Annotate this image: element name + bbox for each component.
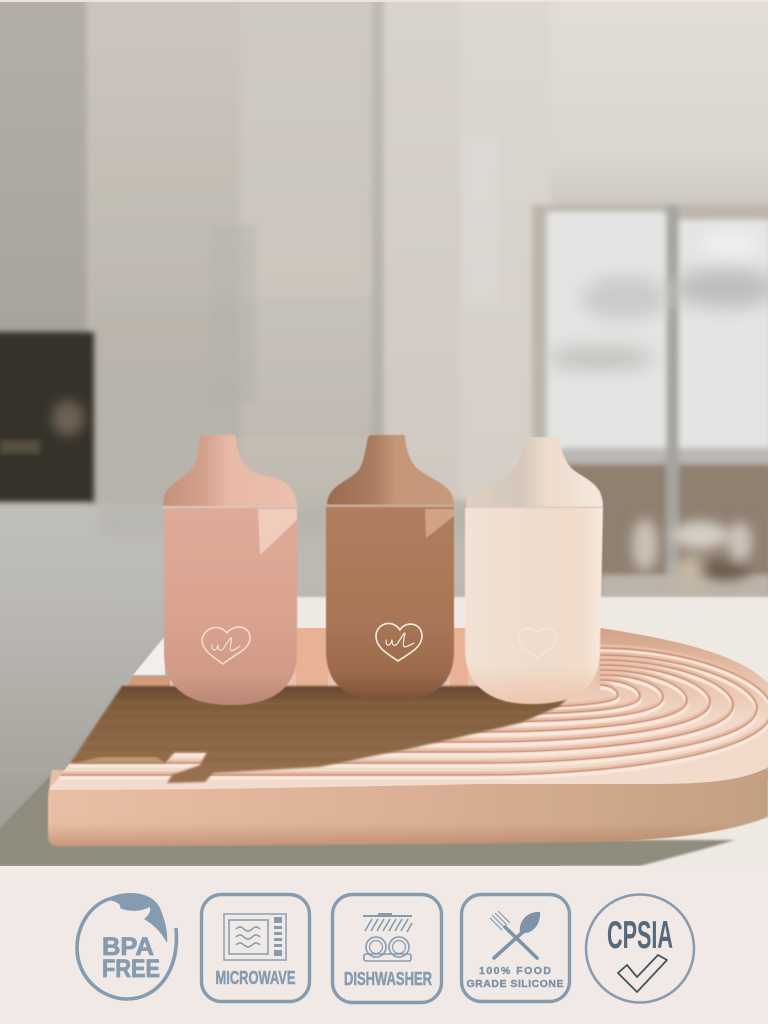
board front edge bbox=[48, 770, 768, 846]
ridges bbox=[60, 646, 768, 778]
cups bbox=[162, 435, 603, 705]
icon: dishwasher bbox=[332, 894, 442, 1002]
cutting board bbox=[48, 628, 768, 846]
icon: CPSIA bbox=[586, 894, 694, 1002]
icon: food grade silicone bbox=[462, 894, 570, 1002]
counter bbox=[296, 596, 768, 683]
icon: BPA free bbox=[77, 893, 176, 999]
icon: CPSIA: CPSIA bbox=[607, 914, 673, 957]
icon: microwave bbox=[202, 894, 310, 1002]
sunlit slab behind cups bbox=[125, 676, 170, 688]
icon: dishwasher: DISHWASHER bbox=[344, 969, 432, 989]
icon: BPA free: FREE bbox=[102, 955, 160, 983]
cup: brown bbox=[326, 435, 454, 701]
cup: cream bbox=[465, 437, 603, 704]
icon: BPA free: BPA bbox=[102, 933, 154, 961]
cast shadow bbox=[70, 686, 578, 783]
panel: certification strip bbox=[0, 866, 768, 1024]
window bbox=[532, 205, 768, 605]
icon: food grade silicone: 100% FOOD bbox=[479, 965, 551, 977]
heart logos bbox=[202, 623, 556, 664]
board shadow on counter bbox=[0, 776, 735, 866]
board top bbox=[50, 628, 768, 790]
oven bbox=[0, 332, 94, 502]
icon: microwave: MICROWAVE bbox=[216, 968, 296, 988]
cup: pink bbox=[162, 435, 298, 705]
icon: food grade silicone: GRADE SILICONE bbox=[466, 978, 564, 990]
